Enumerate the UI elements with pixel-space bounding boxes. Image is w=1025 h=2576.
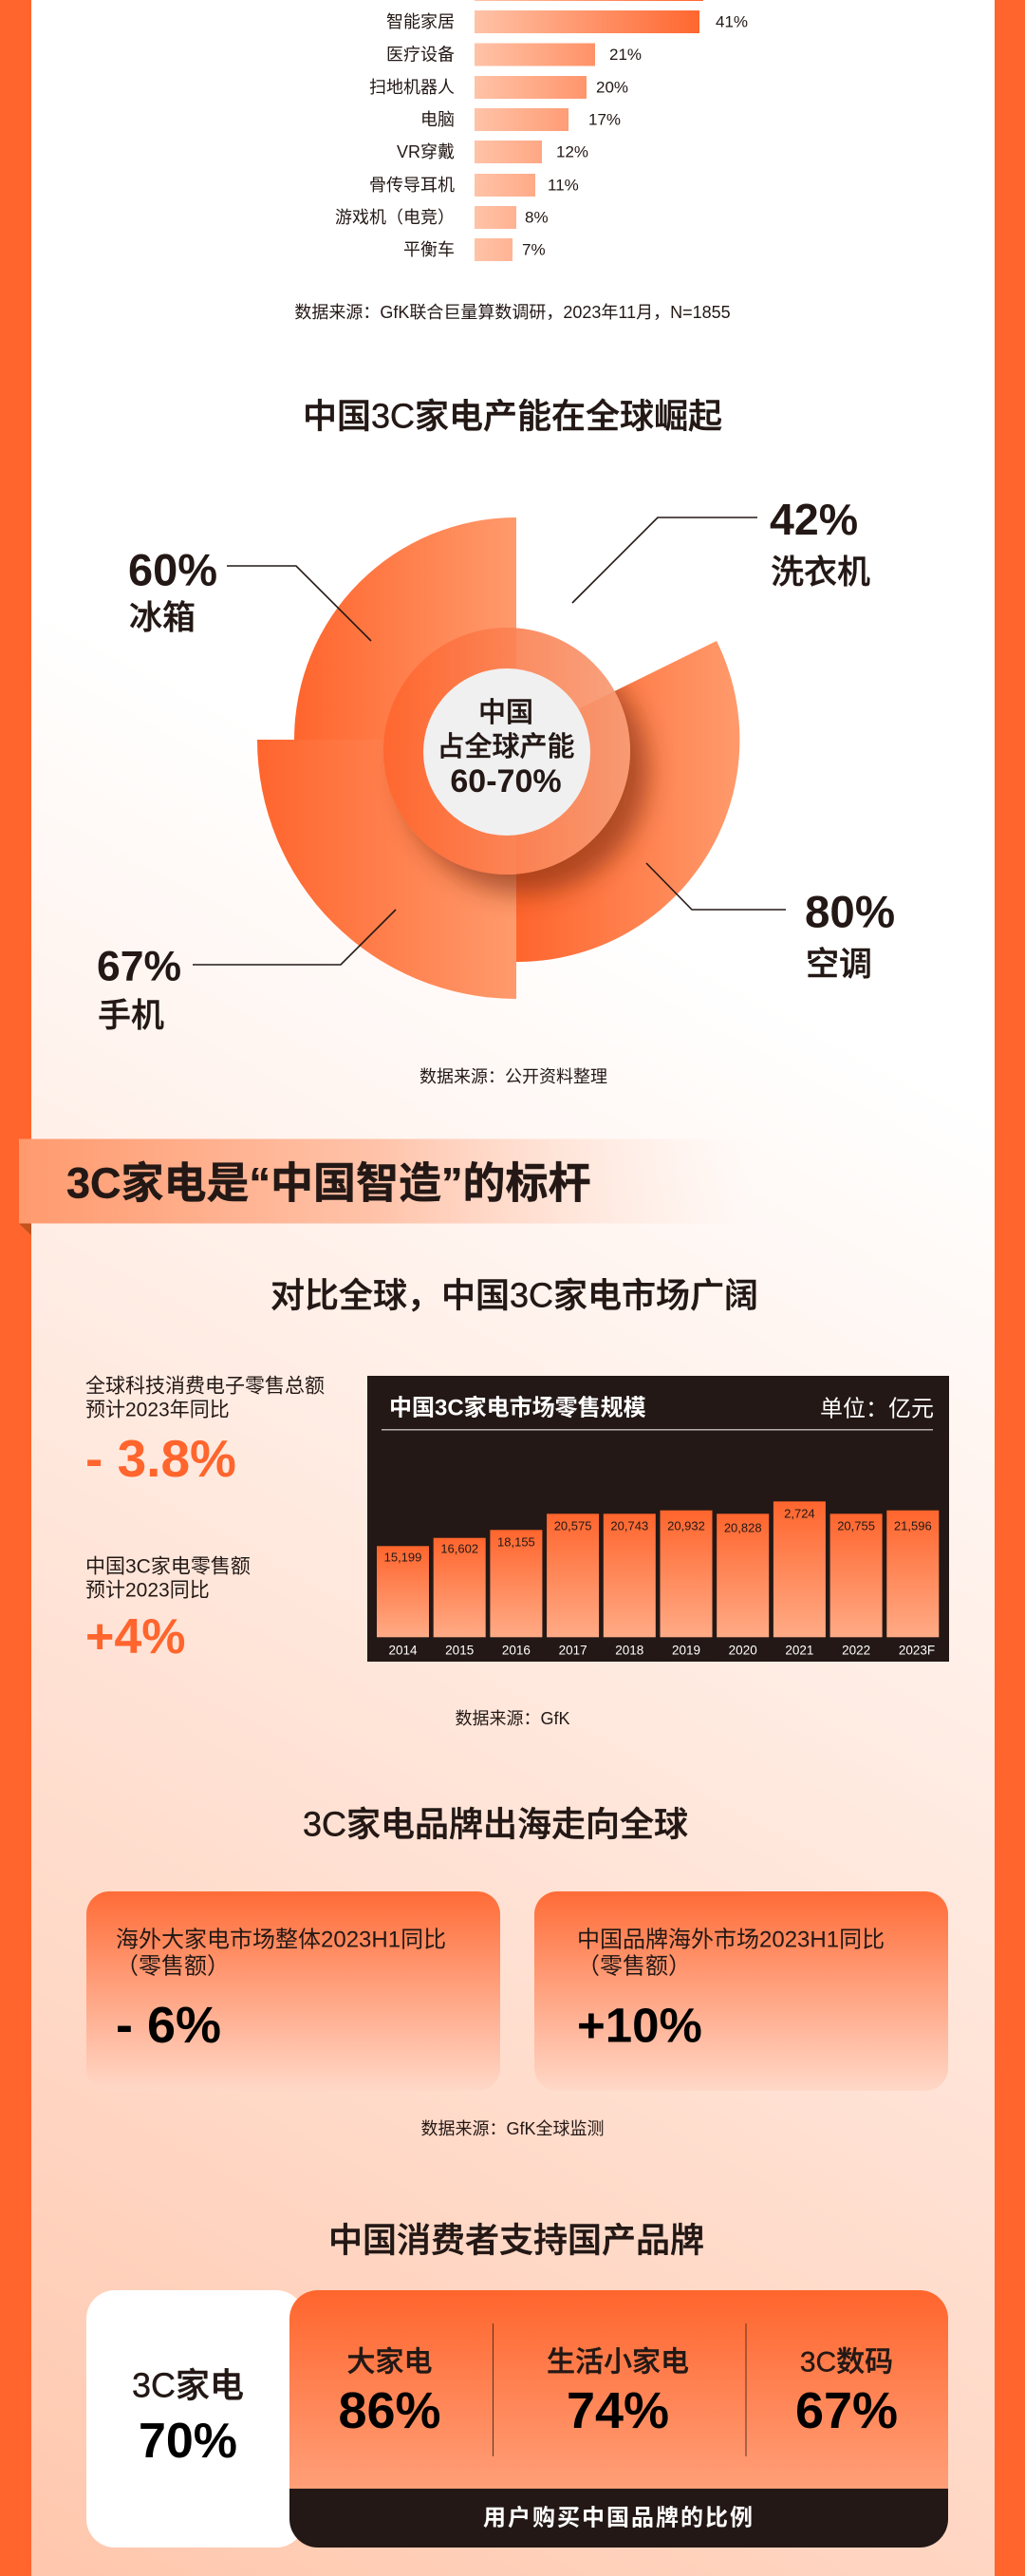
- callout: 60% fridge: 冰箱: [129, 600, 196, 636]
- stat: 3C digital: 3C数码: [800, 2347, 893, 2378]
- column 2017: [547, 1514, 599, 1658]
- sector: air conditioner: [516, 641, 739, 962]
- column 2019: [661, 1511, 712, 1658]
- column 2020: 2020: [729, 1643, 757, 1658]
- card: Chinese brands overseas: [534, 1891, 948, 2091]
- column 2016: 18,155: [497, 1534, 535, 1550]
- card: overseas market: - 6%: [116, 1997, 221, 2054]
- category row: 扫地机器人 20%: 扫地机器人: [369, 78, 455, 97]
- category row: VR穿戴 12%: 12%: [556, 142, 588, 161]
- callout: 42% washing machine: 洗衣机: [771, 555, 870, 591]
- card: overseas market: （零售额）: [116, 1954, 230, 1979]
- category row: 骨传导耳机 11%: 骨传导耳机: [369, 176, 455, 195]
- category row: 电脑 17%: 17%: [588, 110, 621, 129]
- column 2023F: 2023F: [899, 1643, 935, 1658]
- callout: 42% washing machine: [572, 495, 870, 603]
- stat: 3C digital: [795, 2347, 898, 2439]
- stat: large appliances: 大家电: [347, 2347, 433, 2378]
- column 2021: [773, 1501, 826, 1658]
- column 2015: 2015: [445, 1643, 474, 1658]
- panel: 3C overall: 3C家电: [132, 2366, 244, 2404]
- panel: categories: [289, 2290, 948, 2548]
- stat: global decline: 预计2023年同比: [85, 1400, 230, 1420]
- category row: 骨传导耳机 11%: [369, 174, 579, 197]
- panel: 3C overall: [86, 2290, 305, 2548]
- column 2019: 2019: [672, 1643, 700, 1658]
- heading: capacity: 中国3C家电产能在全球崛起: [303, 397, 722, 435]
- category row: 医疗设备 21%: 21%: [609, 46, 642, 64]
- panel: 3C overall: 70%: [139, 2414, 237, 2469]
- column 2023F: [886, 1511, 939, 1658]
- column 2021: 2,724: [784, 1506, 815, 1521]
- column 2020: 20,828: [724, 1521, 762, 1534]
- category row: 扫地机器人 20%: [369, 76, 628, 99]
- column 2014: 15,199: [384, 1550, 421, 1565]
- category row: 平衡车 7%: 平衡车: [403, 240, 455, 259]
- callout: 80% air conditioner: 80%: [805, 887, 895, 938]
- column 2017: 2017: [559, 1643, 587, 1658]
- card: overseas market: [86, 1891, 500, 2091]
- stat: small appliances: [547, 2347, 689, 2439]
- column 2022: 20,755: [837, 1519, 875, 1532]
- callout: 67% phone: [97, 910, 396, 1035]
- stat: China growth: 中国3C家电零售额: [85, 1555, 251, 1578]
- column 2022: [830, 1514, 883, 1658]
- center text: 占全球产能: [437, 731, 575, 762]
- stat: small appliances: 生活小家电: [547, 2347, 689, 2378]
- stat: large appliances: 86%: [338, 2382, 441, 2439]
- category row: VR穿戴 12%: VR穿戴: [397, 142, 455, 161]
- column 2014: 2014: [388, 1643, 418, 1658]
- category row: 游戏机(电竞) 8%: 8%: [525, 209, 549, 226]
- column 2022: 2022: [842, 1643, 870, 1658]
- footer band: [289, 2489, 948, 2548]
- chart unit: 单位：亿元: [820, 1396, 934, 1422]
- column 2014: [377, 1546, 429, 1658]
- callout: 67% phone: 手机: [98, 997, 164, 1035]
- center disc: [423, 668, 590, 836]
- column 2016: [490, 1530, 542, 1658]
- category row: 骨传导耳机 11%: 11%: [548, 177, 579, 194]
- column 2020: [717, 1514, 769, 1658]
- card: Chinese brands overseas: （零售额）: [577, 1954, 691, 1979]
- stat: 3C digital: 67%: [795, 2382, 898, 2439]
- heading: consumer support: 中国消费者支持国产品牌: [328, 2220, 704, 2260]
- column 2021: 2021: [785, 1643, 813, 1658]
- heading: market comparison: 对比全球，中国3C家电市场广阔: [270, 1276, 758, 1314]
- heading: brands go global: 3C家电品牌出海走向全球: [303, 1804, 688, 1844]
- category row: 平衡车 7%: 7%: [522, 241, 546, 258]
- stat: global decline: [85, 1375, 325, 1488]
- category row: 游戏机(电竞) 8%: [335, 206, 549, 229]
- category row: 电脑 17%: [420, 108, 621, 131]
- stat: China growth: [85, 1555, 251, 1664]
- stat: China growth: 预计2023同比: [85, 1580, 210, 1601]
- column 2016: 2016: [502, 1643, 531, 1658]
- category row: 平衡车 7%: [403, 238, 546, 261]
- category row: 游戏机(电竞) 8%: 游戏机（电竞）: [335, 208, 455, 227]
- callout: 60% fridge: 60%: [128, 545, 217, 594]
- center ring: [383, 628, 630, 874]
- category row: 电脑 17%: 电脑: [420, 110, 455, 129]
- callout: 67% phone: 67%: [97, 944, 181, 989]
- panel: retail size bar chart: [367, 1376, 949, 1662]
- callout: 60% fridge: [128, 545, 371, 641]
- stat: global decline: 全球科技消费电子零售总额: [85, 1375, 325, 1398]
- polar chart: global capacity share: [97, 495, 895, 1035]
- category row: 医疗设备 21%: [386, 44, 642, 66]
- sector: fridge: [294, 517, 516, 740]
- stat: small appliances: 74%: [567, 2382, 669, 2439]
- category row: 医疗设备 21%: 医疗设备: [386, 46, 455, 65]
- center text: 60-70%: [450, 763, 562, 799]
- section banner: 3C家电是“中国智造”的标杆: [66, 1158, 591, 1208]
- column 2018: [604, 1514, 656, 1658]
- ring shadow: [401, 647, 648, 893]
- sector: phone: [257, 740, 516, 999]
- card: Chinese brands overseas: 中国品牌海外市场2023H1同比: [577, 1927, 885, 1952]
- column 2019: 20,932: [667, 1519, 705, 1532]
- center text: 中国: [478, 697, 533, 728]
- stat: global decline: - 3.8%: [85, 1429, 236, 1488]
- category row: VR穿戴 12%: [397, 141, 588, 163]
- callout: 80% air conditioner: [646, 863, 895, 984]
- column 2018: 20,743: [610, 1519, 648, 1532]
- column 2015: [434, 1538, 486, 1658]
- footer caption: 用户购买中国品牌的比例: [483, 2505, 755, 2531]
- source note: public data: 数据来源：公开资料整理: [419, 1067, 607, 1086]
- column 2018: 2018: [615, 1643, 643, 1658]
- category row: 扫地机器人 20%: 20%: [596, 78, 628, 97]
- card: overseas market: 海外大家电市场整体2023H1同比: [116, 1927, 446, 1952]
- card: Chinese brands overseas: +10%: [577, 1998, 702, 2053]
- stat: large appliances: [338, 2347, 441, 2439]
- source note: GfK global: 数据来源：GfK全球监测: [420, 2119, 605, 2138]
- center text: [437, 697, 575, 799]
- stat: China growth: +4%: [85, 1609, 186, 1664]
- callout: 42% washing machine: 42%: [770, 495, 858, 544]
- callout: 80% air conditioner: 空调: [806, 946, 872, 984]
- category row: 智能家居 41%: 41%: [716, 13, 748, 30]
- column 2015: 16,602: [440, 1542, 478, 1555]
- category row: 智能家居 41%: 智能家居: [386, 12, 455, 31]
- column 2017: 20,575: [554, 1519, 591, 1532]
- source note: GfK survey: 数据来源：GfK联合巨量算数调研，2023年11月，N=1855: [294, 303, 731, 322]
- category row: 智能家居 41%: [386, 10, 748, 33]
- source note: GfK: 数据来源：GfK: [455, 1709, 570, 1728]
- bar chart: product categories: [335, 0, 748, 261]
- column 2023F: 21,596: [894, 1519, 932, 1532]
- chart title: 中国3C家电市场零售规模: [389, 1396, 646, 1420]
- section banner: [19, 1139, 752, 1235]
